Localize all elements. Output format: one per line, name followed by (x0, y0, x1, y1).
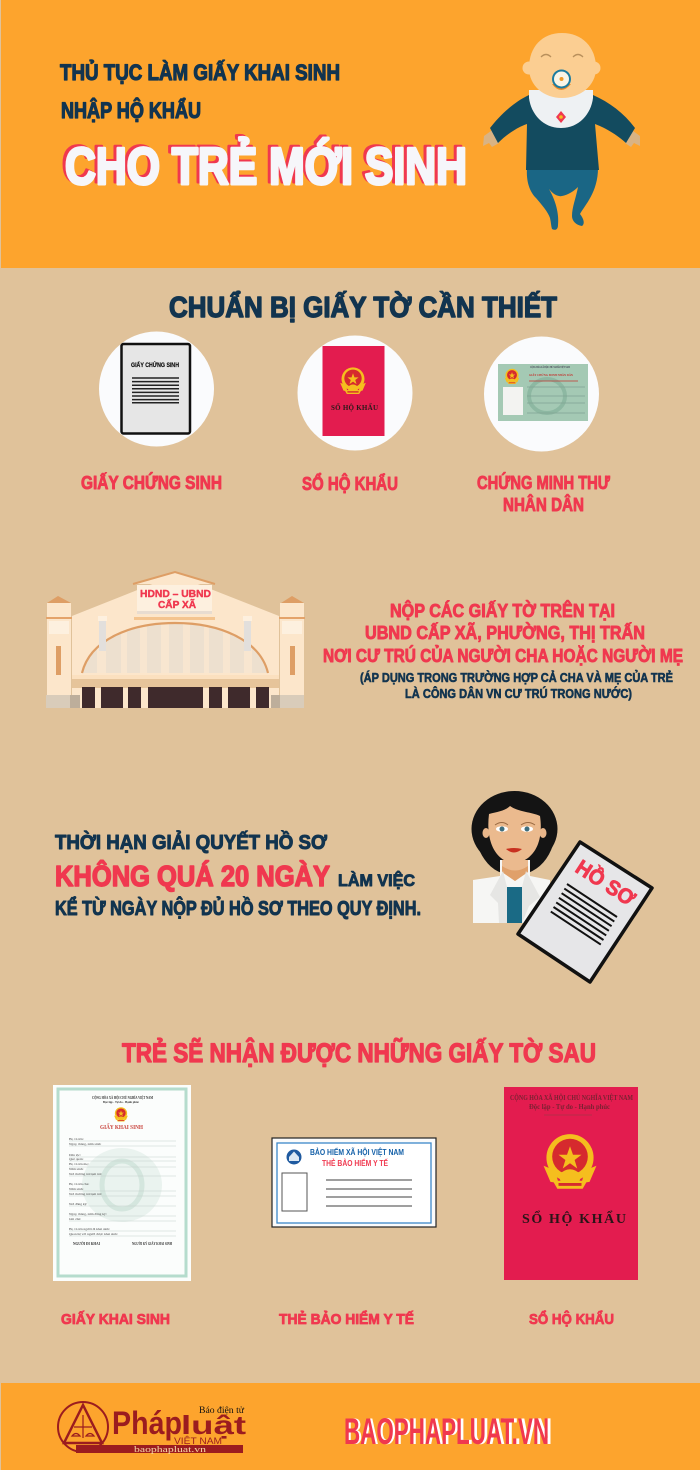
label: sổ hộ khẩu: SỔ HỘ KHẨU (529, 1310, 614, 1328)
document: thẻ bảo hiểm y tế: BẢO HIỂM XÃ HỘI VIỆT NAM (310, 1148, 404, 1157)
icon: government building (46, 572, 305, 708)
document: giấy khai sinh: Họ và tên người đi khai sinh: (69, 1227, 110, 1231)
icon: government building: HDND – UBND (140, 589, 211, 600)
text block: thời hạn giải quyết: KHÔNG QUÁ 20 NGÀY (55, 859, 330, 893)
logo: Pháp luật Việt Nam: luật (181, 1410, 246, 1440)
website: baophapluat.vn: BAOPHAPLUAT.VN (344, 1411, 549, 1452)
document: giấy khai sinh: NGƯỜI ĐI KHAI (73, 1241, 100, 1246)
document: giấy khai sinh: NGƯỜI KÝ GIẤY KHAI SINH (132, 1241, 172, 1246)
document: giấy khai sinh: Nơi đăng ký: (69, 1202, 87, 1206)
document: giấy khai sinh: Họ và tên cha: (69, 1182, 89, 1186)
document: giấy khai sinh: Ngày, tháng, năm đăng ký: (69, 1212, 107, 1217)
website: baophapluat.vn: BAOPHAPLUAT.VN (346, 1411, 552, 1452)
section heading: Chuẩn bị giấy tờ cần thiết: CHUẨN BỊ GIẤY TỜ CẦN THIẾT (169, 290, 557, 324)
icon: woman (472, 791, 558, 923)
heading: Nhập hộ khẩu: NHẬP HỘ KHẨU (61, 98, 201, 123)
document: giấy khai sinh: Dân tộc: (69, 1153, 81, 1157)
label: giấy chứng sinh: GIẤY CHỨNG SINH (81, 472, 222, 493)
document: giấy khai sinh: Ngày, tháng, năm sinh: (69, 1142, 101, 1147)
document: giấy khai sinh: Họ và tên mẹ: (69, 1162, 89, 1166)
icon: hồ sơ document (518, 842, 652, 982)
label: thẻ bảo hiểm y tế: THẺ BẢO HIỂM Y TẾ (279, 1310, 414, 1328)
document item: chứng minh thư (484, 336, 599, 452)
document: giấy khai sinh: Năm sinh: (69, 1167, 84, 1171)
document item: giấy chứng sinh: GIẤY CHỨNG SINH (131, 359, 179, 369)
text block: thời hạn giải quyết: THỜI HẠN GIẢI QUYẾT HỒ SƠ (55, 830, 328, 854)
document: thẻ bảo hiểm y tế (272, 1138, 436, 1227)
document: giấy khai sinh: Năm sinh: (69, 1187, 84, 1191)
document item: sổ hộ khẩu: SỔ HỘ KHẨU (331, 404, 378, 412)
main title: Cho trẻ mới sinh: CHO TRẺ MỚI SINH (65, 137, 467, 196)
text block: thời hạn giải quyết: LÀM VIỆC (338, 871, 415, 890)
document item: chứng minh thư: CỘNG HÒA XÃ HỘI CHỦ NGHĨA VIỆT NAM (530, 364, 570, 369)
header band (1, 0, 700, 268)
logo: Pháp luật Việt Nam (58, 1402, 246, 1454)
label: sổ hộ khẩu: SỔ HỘ KHẨU (302, 473, 398, 494)
document: sổ hộ khẩu lớn (504, 1087, 638, 1280)
label: chứng minh thư nhân dân: NHÂN DÂN (503, 494, 584, 515)
document item: sổ hộ khẩu (298, 336, 412, 450)
text block: nơi nộp giấy tờ (323, 600, 683, 701)
document item: giấy chứng sinh (99, 332, 214, 446)
document: sổ hộ khẩu lớn: CỘNG HÒA XÃ HỘI CHỦ NGHĨA VIỆT NAM (510, 1094, 633, 1102)
footer band (1, 1383, 700, 1470)
document: giấy khai sinh: Ghi chú: (69, 1217, 81, 1221)
logo: Pháp luật Việt Nam: baophapluat.vn (134, 1444, 207, 1454)
label: chứng minh thư nhân dân (477, 472, 610, 515)
document: giấy khai sinh: GIẤY KHAI SINH (100, 1123, 143, 1131)
document: thẻ bảo hiểm y tế: THẺ BẢO HIỂM Y TẾ (322, 1158, 389, 1168)
text block: nơi nộp giấy tờ: UBND CẤP XÃ, PHƯỜNG, THỊ TRẤN (365, 622, 645, 643)
text block: nơi nộp giấy tờ: LÀ CÔNG DÂN VN CƯ TRÚ TRONG NƯỚC) (405, 686, 632, 701)
section heading: trẻ sẽ nhận được: TRẺ SẼ NHẬN ĐƯỢC NHỮNG GIẤY TỜ SAU (122, 1036, 596, 1068)
website: baophapluat.vn (344, 1411, 552, 1452)
logo: Pháp luật Việt Nam: VIỆT NAM (174, 1436, 222, 1447)
icon: baby (483, 33, 640, 230)
logo: Pháp luật Việt Nam: Báo điện tử (199, 1406, 245, 1416)
label: chứng minh thư nhân dân: CHỨNG MINH THƯ (477, 472, 610, 493)
document: giấy khai sinh: CỘNG HÒA XÃ HỘI CHỦ NGHĨA VIỆT NAM (92, 1095, 153, 1100)
document: giấy khai sinh: Độc lập - Tự do - Hạnh phúc (103, 1100, 139, 1104)
heading: Thủ tục làm giấy khai sinh: THỦ TỤC LÀM GIẤY KHAI SINH (60, 60, 340, 85)
text block: nơi nộp giấy tờ: NỘP CÁC GIẤY TỜ TRÊN TẠI (390, 600, 615, 621)
document: giấy khai sinh: Quan hệ với người được khai sinh: (69, 1232, 118, 1236)
document: giấy khai sinh (53, 1085, 191, 1281)
text block: thời hạn giải quyết (55, 830, 421, 920)
document: giấy khai sinh: Nơi thường trú/tạm trú: (69, 1192, 102, 1196)
document: giấy khai sinh: Họ và tên: (69, 1137, 84, 1141)
label: giấy khai sinh: GIẤY KHAI SINH (61, 1311, 170, 1328)
logo: Pháp luật Việt Nam: Pháp (112, 1405, 182, 1441)
document: sổ hộ khẩu lớn: Độc lập - Tự do - Hạnh phúc (529, 1103, 610, 1111)
text block: thời hạn giải quyết: KỂ TỪ NGÀY NỘP ĐỦ HỒ SƠ THEO QUY ĐỊNH. (55, 896, 421, 920)
icon: hồ sơ document: HỒ SƠ (571, 855, 640, 911)
document: giấy khai sinh: Nơi thường trú/tạm trú: (69, 1172, 102, 1176)
main title: Cho trẻ mới sinh: CHO TRẺ MỚI SINH (62, 135, 464, 194)
icon: government building: CẤP XÃ (158, 598, 196, 611)
document: giấy khai sinh: Quê quán: (69, 1157, 84, 1161)
document: sổ hộ khẩu lớn: SỔ HỘ KHẨU (522, 1209, 626, 1227)
document item: chứng minh thư: GIẤY CHỨNG MINH NHÂN DÂN (529, 372, 573, 377)
